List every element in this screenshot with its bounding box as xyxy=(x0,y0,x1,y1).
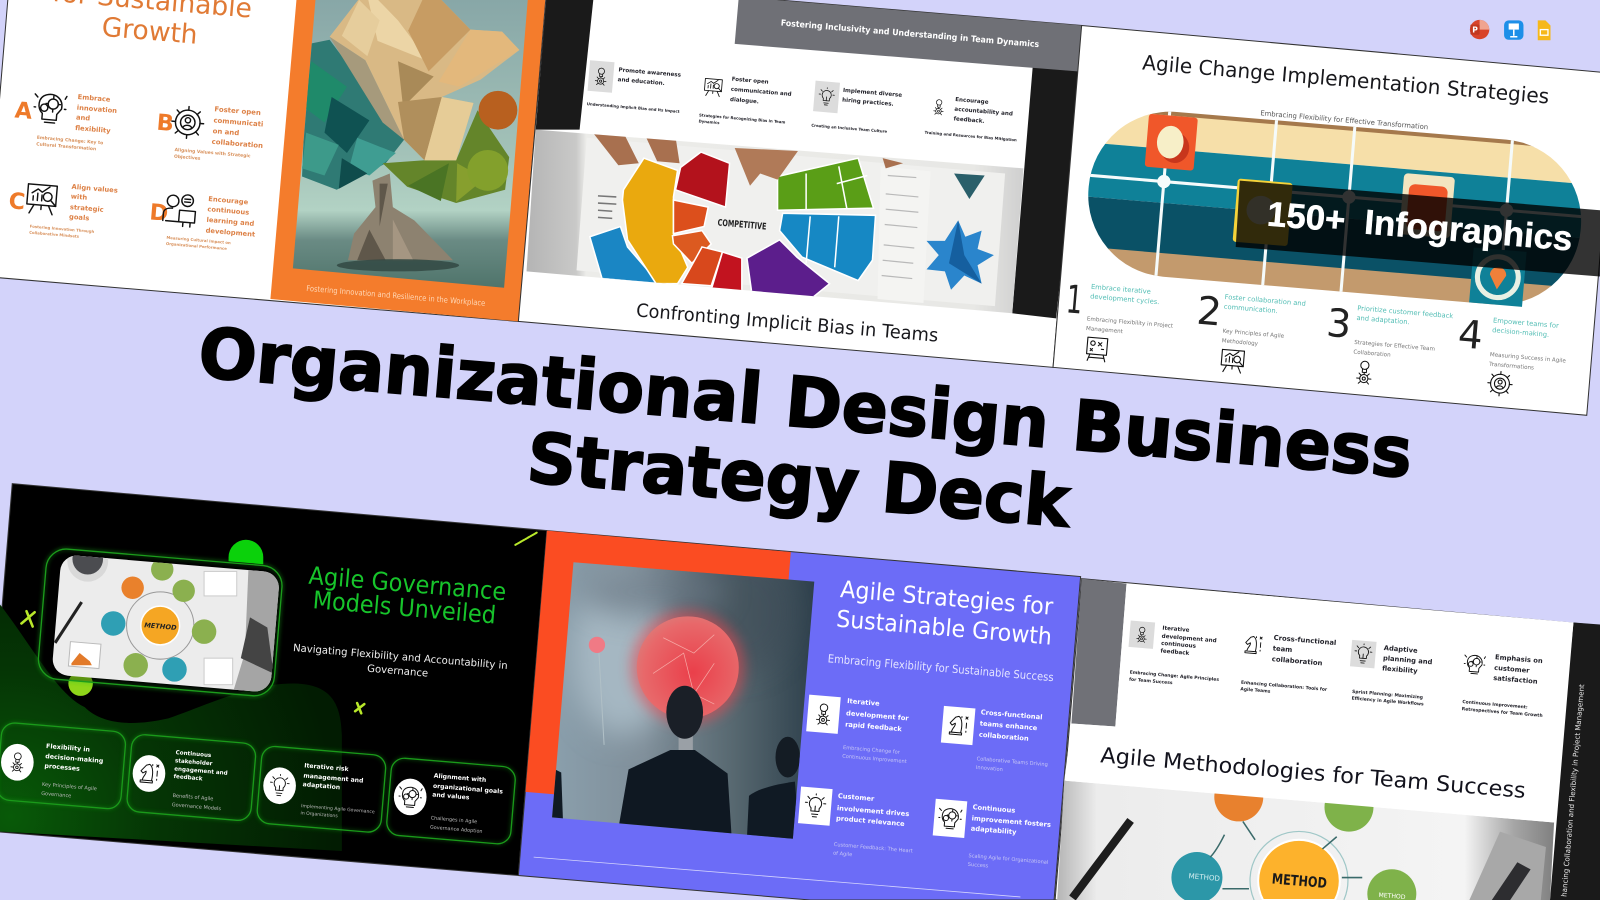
card 4: organizational goals xyxy=(433,783,504,796)
item: cross-functional teams: teams enhance xyxy=(980,719,1038,732)
item: adaptive planning: Efficiency in Agile Workflows xyxy=(1351,695,1424,708)
item: cross-functional teams xyxy=(941,706,1048,777)
item: iterative development: Continuous Improvement xyxy=(842,754,907,765)
heading: Agile Methodologies for Team Success: Agile Methodologies for Team Success xyxy=(1099,743,1527,804)
icon: PowerPoint xyxy=(1470,20,1489,39)
step 3: Prioritize customer feedback xyxy=(1357,304,1454,320)
item: iterative development xyxy=(1129,620,1220,690)
step 2: communication. xyxy=(1224,303,1278,315)
item: customer involvement: Customer xyxy=(838,792,875,803)
item: foster open communication: Dynamics xyxy=(698,118,720,125)
item: iterative development: for Team Success xyxy=(1129,677,1173,686)
item: adaptive planning xyxy=(1350,640,1434,708)
item B: communicati xyxy=(213,116,264,129)
item: encourage accountability: feedback. xyxy=(953,116,985,125)
icon: PowerPoint: P xyxy=(1472,26,1478,35)
banner: grey title strip: Fostering Inclusivity and Understanding in Team Dynamics xyxy=(780,18,1040,49)
item B: collaboration xyxy=(211,138,263,150)
card 1: Key Principles of Agile xyxy=(42,782,97,792)
heading: Confronting Implicit Bias in Teams: Confronting Implicit Bias in Teams xyxy=(635,300,939,347)
card 4 xyxy=(386,757,516,845)
item: cross-functional team: Agile Teams xyxy=(1240,686,1271,695)
step 1: 1 xyxy=(1064,277,1085,324)
item: cross-functional team: Cross-functional xyxy=(1273,634,1337,647)
card 1: Flexibility in xyxy=(46,743,90,754)
image frame: method photo: METHOD xyxy=(144,621,177,632)
item: implement diverse hiring: hiring practices. xyxy=(842,98,894,108)
item D: learning and xyxy=(206,216,255,228)
item C: Fostering Innovation Through xyxy=(30,224,95,234)
item: iterative development: Embracing Change: Agile Principles xyxy=(1129,669,1220,683)
card 2: stakeholder xyxy=(175,758,213,767)
panel: slide Confronting Implicit Bias xyxy=(518,0,1082,367)
step 4: Transformations xyxy=(1488,362,1534,372)
heading: Agile Change Implementation Strategies: Agile Change Implementation Strategies xyxy=(1141,50,1550,109)
title: Organizational Design Business Strategy Deck: Organizational Design Business xyxy=(196,314,1415,494)
item: customer involvement xyxy=(798,786,913,863)
item: cross-functional team: collaboration xyxy=(1272,655,1323,667)
step 3: Strategies for Effective Team xyxy=(1354,340,1435,353)
item: iterative development: Iterative xyxy=(1162,626,1190,634)
card 4: Alignment with xyxy=(434,773,486,784)
item B xyxy=(156,105,266,166)
step 1: Management xyxy=(1086,326,1124,335)
heading: Agile Governance Models Unveiled: Agile Governance xyxy=(308,561,507,606)
item D xyxy=(148,193,259,251)
icon: Google Slides xyxy=(1538,20,1551,40)
icon: Keynote xyxy=(1504,20,1523,40)
item: iterative development: rapid feedback xyxy=(845,720,903,733)
item: cross-functional teams: collaboration xyxy=(979,731,1029,743)
marks: yellow crosses xyxy=(21,533,537,713)
step 3: Collaboration xyxy=(1353,350,1391,359)
photo: method diagram: METHOD xyxy=(1188,871,1221,883)
item: continuous improvement: Continuous xyxy=(972,803,1016,815)
item: continuous improvement xyxy=(933,799,1052,874)
shape: green blob xyxy=(0,598,342,851)
item: implement diverse hiring xyxy=(811,81,902,134)
item B: B xyxy=(156,110,175,137)
item: promote awareness xyxy=(587,60,682,114)
item C: goals xyxy=(69,213,90,222)
item: adaptive planning: planning and xyxy=(1383,654,1433,666)
step 2: 2 xyxy=(1195,289,1223,335)
title: Organizational Design Business Strategy Deck: Strategy Deck xyxy=(524,419,1075,544)
item D: development xyxy=(205,227,256,239)
subheading: Embracing Flexibility: Embracing Flexibility for Sustainable Success xyxy=(827,652,1054,684)
item: promote awareness: Promote awareness xyxy=(618,67,682,79)
item: foster open communication: Strategies for Recognizing Bias in Team xyxy=(699,112,786,125)
item: continuous improvement: Scaling Agile for Organizational xyxy=(968,853,1049,866)
item: customer satisfaction: Continuous Improvement: xyxy=(1462,699,1528,711)
item: encourage accountability: accountability and xyxy=(954,107,1013,118)
item A: and xyxy=(76,113,91,123)
item: customer involvement: involvement drives xyxy=(837,804,910,818)
item B: on and xyxy=(212,127,240,137)
item D: D xyxy=(148,199,169,227)
card 1: decision-making xyxy=(45,753,104,765)
shape: lime striped circle xyxy=(68,671,93,696)
item: cross-functional teams: Innovation xyxy=(976,765,1003,773)
step 1: Embrace iterative xyxy=(1091,283,1151,296)
card 2: engagement and xyxy=(174,766,228,777)
illustration: origami tree xyxy=(293,0,529,288)
card 2: Benefits of Agile xyxy=(172,793,214,802)
card 3: in Organizations xyxy=(300,810,339,819)
panel: slide Agile Methodologies for Team Success xyxy=(1055,579,1600,900)
item: customer satisfaction: Emphasis on xyxy=(1495,653,1543,665)
step 3: and adaptation. xyxy=(1356,314,1410,326)
card 3: Implementing Agile Governance xyxy=(301,803,375,815)
banner: 150+ Infographics: 150+ Infographics xyxy=(1266,196,1574,259)
item D: Measuring Cultural Impact on xyxy=(166,235,231,245)
panel: slide Agile Strategies for Sustainable Growth xyxy=(518,531,1081,900)
item B: Aligning Values with Strategic xyxy=(174,147,251,159)
step 1: development cycles. xyxy=(1090,292,1160,306)
item: iterative development: development for xyxy=(846,709,910,723)
step 4 xyxy=(1456,312,1567,397)
item: foster open communication xyxy=(698,77,793,131)
heading: Agile Strategies for Sustainable Growth xyxy=(835,575,1054,651)
item: cross-functional team xyxy=(1240,634,1337,700)
photo: method diagram: METHOD xyxy=(1271,871,1328,892)
item A xyxy=(14,93,118,153)
side label: vertical strip text: hancing Collaboration and Flexibility in Project Management xyxy=(1559,684,1586,897)
item C xyxy=(8,183,118,240)
item D: Organizational Performance xyxy=(166,241,227,251)
item: continuous improvement: improvement fosters xyxy=(971,814,1051,829)
heading: Agile Strategies for Sustainable Growth: Sustainable Growth xyxy=(835,605,1053,651)
banner: grey title strip xyxy=(735,0,1082,71)
step 2: Key Principles of Agile xyxy=(1222,329,1285,340)
item B: Objectives xyxy=(174,154,201,162)
card 2: Continuous xyxy=(175,750,212,759)
photo: man facing red sphere xyxy=(548,551,814,843)
item: adaptive planning: Adaptive xyxy=(1384,644,1418,655)
item: iterative development: Iterative xyxy=(847,697,880,708)
item: customer satisfaction: satisfaction xyxy=(1493,674,1538,686)
heading: Agile Strategies for Sustainable Growth: Agile Strategies for xyxy=(839,575,1054,621)
step 1 xyxy=(1064,277,1174,362)
item: cross-functional teams: Cross-functional xyxy=(980,708,1043,721)
panel: slide Agile Change Implementation Strategies xyxy=(1053,26,1600,415)
item: iterative development: Embracing Change for xyxy=(843,745,901,756)
step 4: Empower teams for xyxy=(1493,316,1559,330)
card 4: and values xyxy=(432,791,470,802)
item C: Align values xyxy=(71,183,118,195)
subheading: Embracing Flexibility for Effective Transformation xyxy=(1260,109,1428,131)
caption: orange panel: Fostering Innovation and Resilience in the Workplace xyxy=(306,284,486,308)
card 2: Governance Models xyxy=(172,802,222,812)
item: cross-functional team: Enhancing Collaboration: Tools for xyxy=(1241,680,1328,693)
card 1: processes xyxy=(44,763,80,773)
panel: slide Agile Governance Models xyxy=(0,484,547,876)
step 4: 4 xyxy=(1456,312,1485,359)
item: customer involvement: product relevance xyxy=(836,814,905,828)
card 2 xyxy=(126,734,257,821)
item: iterative development: feedback xyxy=(1160,648,1190,657)
item: promote awareness: and education. xyxy=(617,77,665,87)
item: implement diverse hiring: Creating an Inclusive Team Culture xyxy=(811,123,888,134)
step 2: Methodology xyxy=(1221,338,1259,347)
image frame: method photo xyxy=(35,545,286,700)
heading: for Sustainable Growth: Growth xyxy=(101,12,199,51)
banner: 150+ Infographics xyxy=(1236,181,1600,277)
step 1: Embracing Flexibility in Project xyxy=(1087,316,1174,330)
step 2 xyxy=(1195,289,1306,373)
card 3 xyxy=(256,745,387,833)
item A: innovation xyxy=(76,104,118,115)
item C: strategic xyxy=(70,203,104,214)
item C: C xyxy=(8,188,26,216)
item: promote awareness: Understanding Implicit Bias and Its Impact xyxy=(587,101,680,114)
image: roadmap pill xyxy=(1088,112,1582,307)
item D: continuous xyxy=(207,205,250,217)
step 4: decision-making. xyxy=(1492,326,1550,339)
panel: slide Agile Culture orange xyxy=(0,0,547,321)
item: foster open communication: Foster open xyxy=(731,77,769,86)
item C: Collaborative Mindsets xyxy=(29,230,80,239)
item: cross-functional teams: Collaborative Teams Driving xyxy=(976,756,1048,768)
subheading: Navigating Flexibility: Governance xyxy=(367,664,429,680)
item: adaptive planning: Sprint Planning: Maximizing xyxy=(1352,689,1423,701)
subheading: Navigating Flexibility: Navigating Flexibility and Accountability in xyxy=(293,643,508,672)
chart label: COMPETITIVE: COMPETITIVE xyxy=(717,218,767,233)
item: foster open communication: communication and xyxy=(731,87,792,98)
heading: Agile Governance Models Unveiled: Models Unveiled xyxy=(312,585,497,630)
item D: Encourage xyxy=(208,195,249,206)
item: foster open communication: dialogue. xyxy=(730,97,759,105)
step 3 xyxy=(1325,301,1454,384)
item: adaptive planning: flexibility xyxy=(1382,664,1418,675)
item: implement diverse hiring: Implement diverse xyxy=(843,88,902,99)
item: customer involvement: Customer Feedback: The Heart xyxy=(834,842,913,855)
item: encourage accountability xyxy=(924,97,1017,142)
item B: Foster open xyxy=(214,105,261,117)
step 4: Measuring Success in Agile xyxy=(1490,352,1567,365)
step 3: 3 xyxy=(1325,301,1353,348)
item: customer satisfaction xyxy=(1461,653,1543,719)
item: cross-functional team: team xyxy=(1272,644,1293,654)
item A: A xyxy=(14,97,34,125)
item: customer involvement: of Agile xyxy=(833,851,852,858)
item: encourage accountability: Training and Resources for Bias Mitigation xyxy=(924,130,1017,142)
photo: competitive wheel xyxy=(527,130,1023,313)
item: iterative development xyxy=(806,695,911,765)
card 3: Iterative risk xyxy=(304,762,350,773)
card 4: Challenges in Agile xyxy=(430,815,477,825)
item: iterative development: development and xyxy=(1161,634,1217,644)
card 3: adaptation xyxy=(302,781,340,791)
item: customer satisfaction: Retrospectives for Team Growth xyxy=(1461,706,1543,719)
item: encourage accountability: Encourage xyxy=(955,97,989,106)
card 2: feedback xyxy=(173,774,203,782)
item A: flexibility xyxy=(75,124,111,135)
step 2: Foster collaboration and xyxy=(1224,293,1306,308)
item A: Embrace xyxy=(77,93,111,104)
item: continuous improvement: Success xyxy=(967,862,989,870)
heading: Agile Governance Models Unveiled xyxy=(308,561,507,630)
card 3: management and xyxy=(303,773,364,785)
item C: with xyxy=(70,192,88,202)
shape: green circle xyxy=(229,540,263,564)
item: iterative development: continuous xyxy=(1161,641,1197,650)
item: continuous improvement: adaptability xyxy=(970,825,1017,836)
card 1: Governance xyxy=(41,791,71,799)
photo: method diagram xyxy=(1057,772,1554,900)
card 4: Governance Adoption xyxy=(430,825,483,835)
item A: Cultural Transformation xyxy=(36,141,96,152)
item A: Embracing Change: Key to xyxy=(37,135,103,146)
item: customer satisfaction: customer xyxy=(1494,664,1531,675)
card 1 xyxy=(0,722,126,810)
